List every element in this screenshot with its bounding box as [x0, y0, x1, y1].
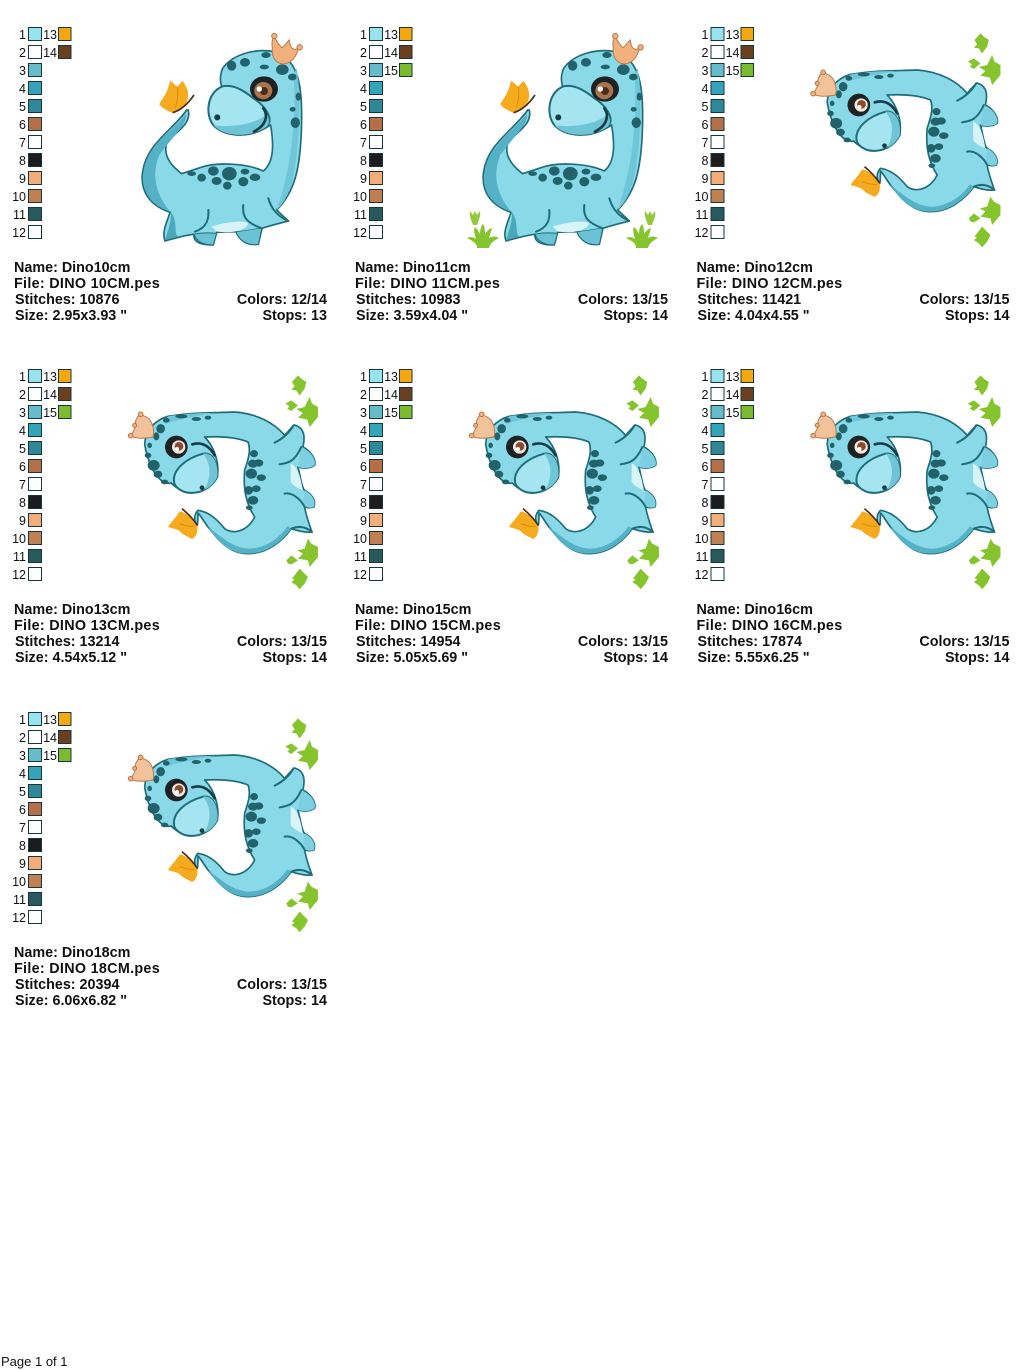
- colour legend: 10: [353, 190, 367, 204]
- design details: Name: Dino10cm: [14, 260, 130, 276]
- colour legend: 13: [43, 713, 57, 727]
- colour legend: 11: [13, 893, 26, 907]
- design details: Stops: 14: [262, 993, 327, 1009]
- colour legend: 5: [360, 442, 367, 456]
- colour legend: 7: [360, 136, 367, 150]
- design details: Size: 3.59x4.04 ": [356, 308, 468, 324]
- colour legend: 5: [19, 100, 26, 114]
- design details: File: DINO 18CM.pes: [14, 961, 160, 977]
- colour legend: [353, 28, 412, 240]
- colour legend: 13: [43, 28, 57, 42]
- colour legend: 6: [360, 460, 367, 474]
- panel: Dino10cm: [12, 28, 327, 324]
- colour legend: 14: [726, 388, 740, 402]
- design details: [14, 260, 327, 324]
- colour legend: 8: [360, 496, 367, 510]
- colour legend: 12: [353, 568, 367, 582]
- colour legend: 9: [19, 172, 26, 186]
- colour legend: 7: [19, 478, 26, 492]
- colour legend: 10: [353, 532, 367, 546]
- design details: Size: 4.04x4.55 ": [698, 308, 810, 324]
- design details: Stops: 14: [603, 308, 668, 324]
- colour legend: 12: [695, 226, 709, 240]
- colour legend: 10: [12, 875, 26, 889]
- colour legend: 4: [702, 82, 709, 96]
- design details: Name: Dino16cm: [696, 602, 813, 618]
- dinosaur illustration: [128, 375, 318, 589]
- design details: [355, 260, 668, 324]
- colour legend: 15: [726, 406, 740, 420]
- design details: Colors: 12/14: [237, 292, 327, 308]
- design details: Stitches: 10983: [356, 292, 460, 308]
- colour legend: 14: [726, 46, 740, 60]
- design details: Size: 5.55x6.25 ": [698, 650, 810, 666]
- colour legend: 8: [19, 839, 26, 853]
- design details: Stitches: 11421: [698, 292, 801, 308]
- colour legend: 5: [702, 100, 709, 114]
- colour legend: 4: [702, 424, 709, 438]
- panel: Dino18cm: [12, 712, 327, 1009]
- colour legend: 4: [19, 767, 26, 781]
- panel: Dino16cm: [695, 370, 1010, 666]
- colour legend: [695, 28, 754, 240]
- colour legend: 13: [43, 370, 57, 384]
- colour legend: 15: [384, 406, 398, 420]
- colour legend: 15: [726, 64, 740, 78]
- design details: [696, 602, 1010, 666]
- colour legend: 2: [702, 46, 709, 60]
- design details: Colors: 13/15: [919, 292, 1010, 308]
- design details: Stops: 14: [262, 650, 327, 666]
- colour legend: 5: [19, 442, 26, 456]
- colour legend: 13: [384, 28, 398, 42]
- design details: File: DINO 13CM.pes: [14, 618, 160, 634]
- design details: Name: Dino15cm: [355, 602, 471, 618]
- dinosaur illustration: [128, 718, 318, 932]
- colour legend: 12: [353, 226, 367, 240]
- colour legend: 1: [19, 370, 26, 384]
- colour legend: 1: [360, 370, 367, 384]
- design details: Colors: 13/15: [919, 634, 1010, 650]
- colour legend: 13: [726, 370, 740, 384]
- design details: Name: Dino12cm: [696, 260, 813, 276]
- colour legend: 7: [702, 136, 709, 150]
- dinosaur illustration: [811, 33, 1000, 247]
- colour legend: 6: [702, 118, 709, 132]
- colour legend: 1: [702, 370, 709, 384]
- colour legend: 5: [702, 442, 709, 456]
- colour legend: 4: [360, 82, 367, 96]
- colour legend: 11: [354, 208, 367, 222]
- dinosaur illustration: [469, 375, 659, 589]
- colour legend: 6: [360, 118, 367, 132]
- colour legend: 10: [695, 190, 709, 204]
- colour legend: 8: [702, 496, 709, 510]
- colour legend: 8: [19, 496, 26, 510]
- colour legend: 7: [702, 478, 709, 492]
- design details: Stitches: 17874: [698, 634, 802, 650]
- colour legend: 15: [43, 749, 57, 763]
- design details: Colors: 13/15: [237, 634, 327, 650]
- dinosaur illustration with grass: [467, 33, 658, 248]
- colour legend: 10: [695, 532, 709, 546]
- design details: [14, 602, 327, 666]
- colour legend: 10: [12, 532, 26, 546]
- colour legend: 3: [360, 406, 367, 420]
- colour legend: 6: [19, 460, 26, 474]
- colour legend: 11: [13, 208, 26, 222]
- colour legend: 11: [696, 550, 709, 564]
- colour legend: 3: [360, 64, 367, 78]
- design details: Colors: 13/15: [578, 634, 668, 650]
- panel: Dino11cm: [353, 28, 668, 324]
- colour legend: 6: [19, 118, 26, 132]
- colour legend: 9: [19, 514, 26, 528]
- colour legend: [695, 370, 754, 582]
- colour legend: 9: [702, 172, 709, 186]
- colour legend: 2: [19, 388, 26, 402]
- colour legend: 3: [19, 406, 26, 420]
- colour legend: 11: [354, 550, 367, 564]
- colour legend: 9: [360, 514, 367, 528]
- colour legend: 7: [360, 478, 367, 492]
- colour legend: [12, 28, 71, 240]
- colour legend: 8: [702, 154, 709, 168]
- design details: Stops: 14: [945, 308, 1010, 324]
- colour legend: 14: [43, 731, 57, 745]
- colour legend: 5: [19, 785, 26, 799]
- colour legend: 3: [19, 64, 26, 78]
- colour legend: 12: [12, 568, 26, 582]
- colour legend: [12, 712, 71, 925]
- colour legend: 1: [360, 28, 367, 42]
- panel: Dino15cm: [353, 370, 668, 666]
- colour legend: 4: [360, 424, 367, 438]
- design details: Stitches: 10876: [15, 292, 119, 308]
- design details: [355, 602, 668, 666]
- design details: Stitches: 14954: [356, 634, 460, 650]
- design details: File: DINO 10CM.pes: [14, 276, 160, 292]
- dinosaur illustration: [142, 33, 302, 245]
- colour legend: 3: [702, 406, 709, 420]
- colour legend: 3: [702, 64, 709, 78]
- design details: Name: Dino13cm: [14, 602, 130, 618]
- design details: Stops: 13: [262, 308, 327, 324]
- design details: Size: 2.95x3.93 ": [15, 308, 127, 324]
- design details: Colors: 13/15: [237, 977, 327, 993]
- colour legend: 10: [12, 190, 26, 204]
- colour legend: 3: [19, 749, 26, 763]
- design details: Stitches: 13214: [15, 634, 119, 650]
- colour legend: 13: [384, 370, 398, 384]
- design details: File: DINO 15CM.pes: [355, 618, 501, 634]
- colour legend: 9: [360, 172, 367, 186]
- design details: Colors: 13/15: [578, 292, 668, 308]
- colour legend: 8: [360, 154, 367, 168]
- panel: Dino12cm: [695, 28, 1010, 324]
- design details: File: DINO 16CM.pes: [696, 618, 842, 634]
- design details: Name: Dino18cm: [14, 945, 130, 961]
- colour legend: 1: [702, 28, 709, 42]
- colour legend: 1: [19, 28, 26, 42]
- page footer: Page 1 of 1: [1, 1354, 68, 1369]
- colour legend: 7: [19, 136, 26, 150]
- colour legend: 2: [19, 46, 26, 60]
- colour legend: 14: [384, 388, 398, 402]
- design details: Name: Dino11cm: [355, 260, 471, 276]
- colour legend: 2: [360, 388, 367, 402]
- design details: [696, 260, 1010, 324]
- design details: Size: 4.54x5.12 ": [15, 650, 127, 666]
- colour legend: 2: [702, 388, 709, 402]
- colour legend: 13: [726, 28, 740, 42]
- design details: [14, 945, 327, 1009]
- colour legend: 14: [384, 46, 398, 60]
- design details: Size: 5.05x5.69 ": [356, 650, 468, 666]
- colour legend: 2: [360, 46, 367, 60]
- colour legend: 11: [13, 550, 26, 564]
- colour legend: [353, 370, 412, 582]
- design details: Stitches: 20394: [15, 977, 119, 993]
- colour legend: 1: [19, 713, 26, 727]
- colour legend: 14: [43, 46, 57, 60]
- colour legend: 11: [696, 208, 709, 222]
- colour legend: 2: [19, 731, 26, 745]
- colour legend: 5: [360, 100, 367, 114]
- colour legend: 4: [19, 82, 26, 96]
- colour legend: 4: [19, 424, 26, 438]
- colour legend: 12: [695, 568, 709, 582]
- colour legend: 15: [43, 406, 57, 420]
- colour legend: 9: [19, 857, 26, 871]
- design details: Size: 6.06x6.82 ": [15, 993, 127, 1009]
- colour legend: 14: [43, 388, 57, 402]
- colour legend: 9: [702, 514, 709, 528]
- colour legend: 6: [19, 803, 26, 817]
- design details: Stops: 14: [945, 650, 1010, 666]
- dinosaur illustration: [811, 375, 1000, 589]
- colour legend: 15: [384, 64, 398, 78]
- design details: File: DINO 12CM.pes: [696, 276, 842, 292]
- design details: Stops: 14: [603, 650, 668, 666]
- colour legend: 12: [12, 911, 26, 925]
- panel: Dino13cm: [12, 370, 327, 666]
- colour legend: 6: [702, 460, 709, 474]
- colour legend: 7: [19, 821, 26, 835]
- colour legend: 8: [19, 154, 26, 168]
- design details: File: DINO 11CM.pes: [355, 276, 500, 292]
- colour legend: [12, 370, 71, 582]
- colour legend: 12: [12, 226, 26, 240]
